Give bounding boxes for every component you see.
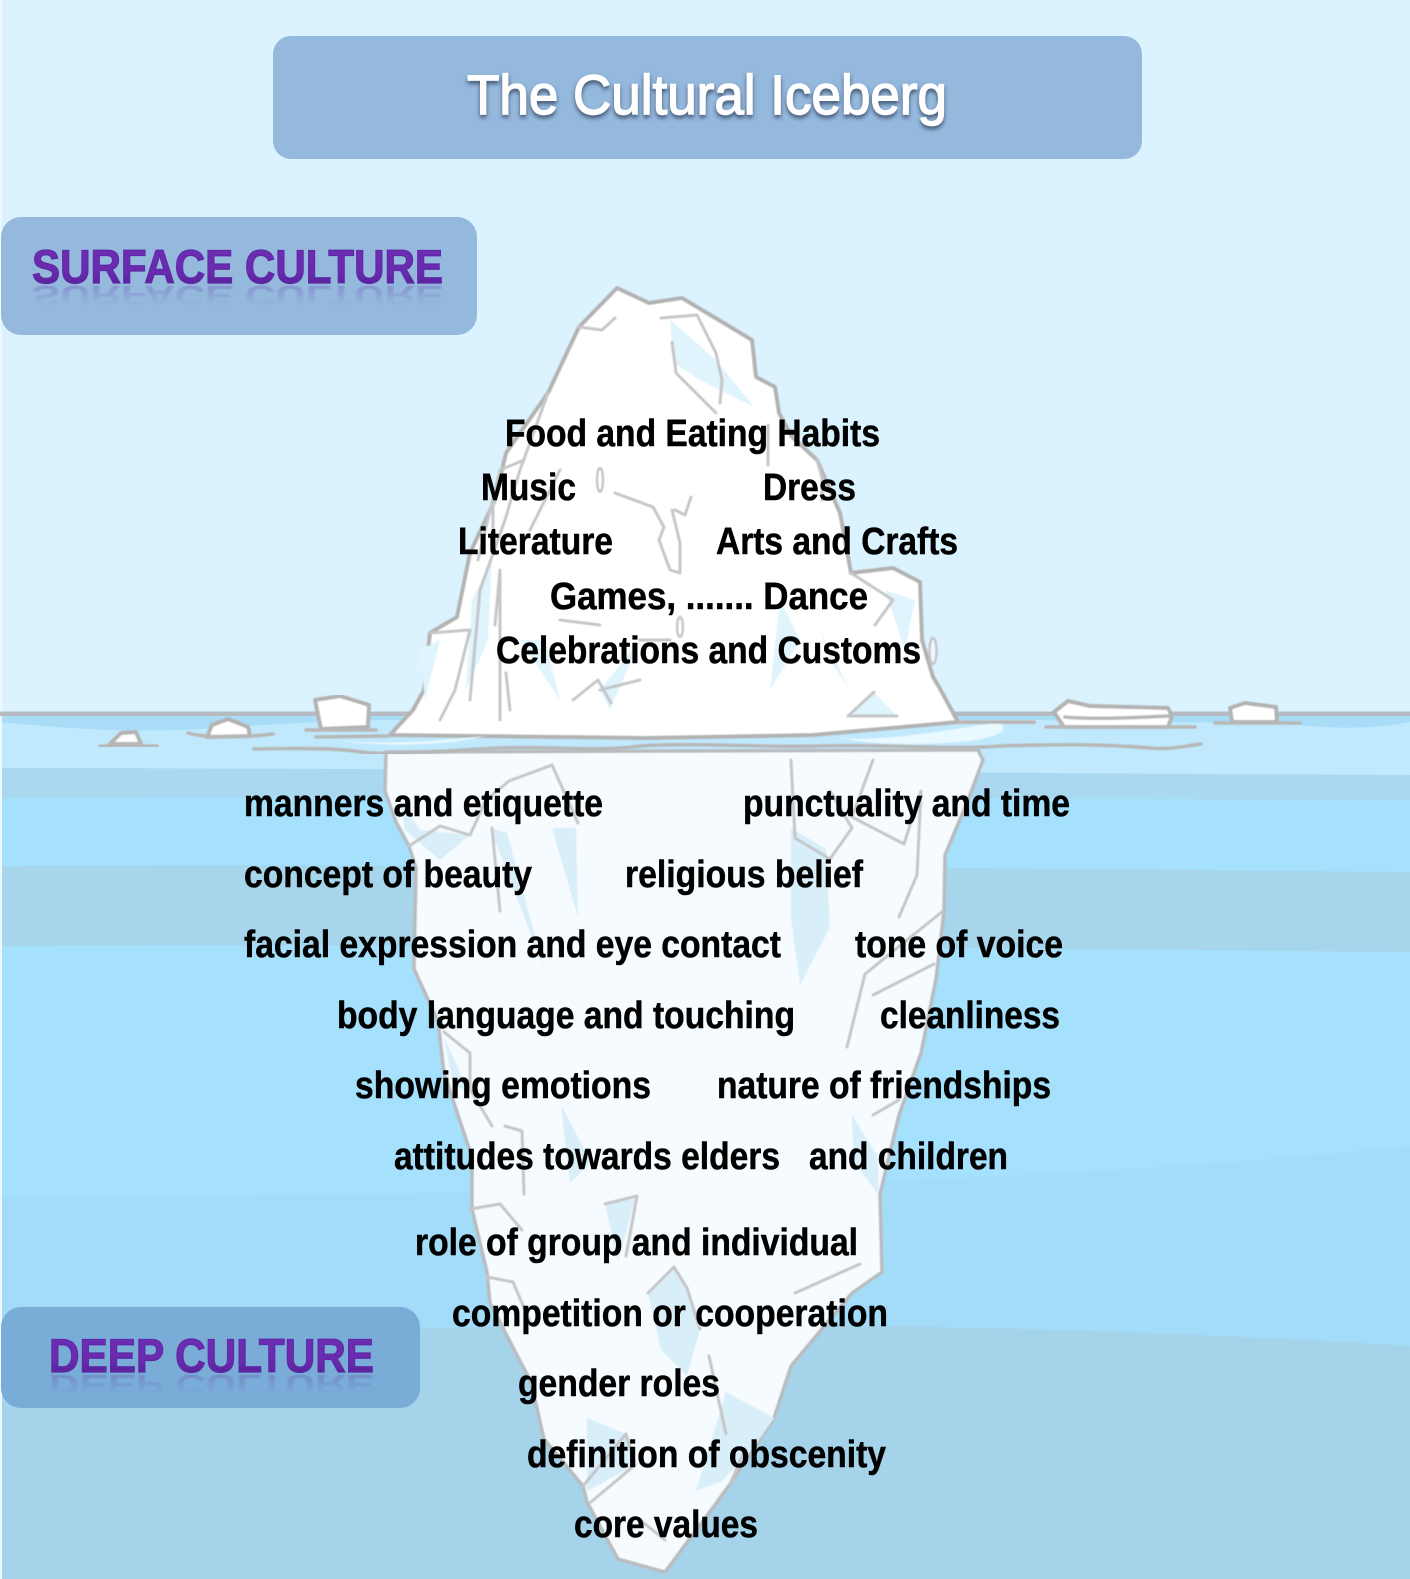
- text block: surface culture items: Music: [481, 467, 576, 509]
- iceberg: above water part: [390, 288, 958, 738]
- title text: The Cultural Iceberg: [467, 63, 947, 126]
- horizon line: [0, 712, 1410, 716]
- text block: surface culture items: [458, 413, 958, 672]
- text block: deep culture items, upper: cleanliness: [880, 995, 1060, 1037]
- text block: deep culture items, lower: core values: [574, 1504, 758, 1546]
- text block: surface culture items: Arts and Crafts: [716, 521, 958, 563]
- fragment 1: [110, 732, 141, 744]
- fragment 2: [207, 719, 250, 737]
- text block: deep culture items, upper: and children: [809, 1136, 1008, 1178]
- text block: deep culture items, upper: [244, 783, 1070, 1178]
- title banner: [273, 36, 1142, 159]
- text block: deep culture items, upper: facial expression and eye contact: [244, 924, 781, 966]
- fragment 4: [1054, 701, 1172, 727]
- panel: surface culture label: [1, 217, 477, 335]
- text block: deep culture items, lower: role of group and individual: [415, 1222, 858, 1264]
- text block: surface culture items: Dress: [763, 467, 856, 509]
- background: sky: [0, 0, 1410, 716]
- deep culture reflection: DEEP CULTURE: [49, 1368, 374, 1400]
- text block: deep culture items, lower: competition or cooperation: [452, 1293, 888, 1335]
- surface culture reflection: SURFACE CULTURE: [32, 279, 443, 311]
- text block: deep culture items, upper: nature of friendships: [717, 1065, 1051, 1107]
- surface culture text: SURFACE CULTURE: [32, 240, 443, 293]
- text block: surface culture items: Celebrations and Customs: [496, 630, 921, 672]
- iceberg: underwater part: [385, 750, 983, 1572]
- text block: surface culture items: Food and Eating Habits: [505, 413, 880, 455]
- text block: deep culture items, upper: tone of voice: [855, 924, 1063, 966]
- panel: deep culture label: [1, 1307, 420, 1408]
- deep culture text: DEEP CULTURE: [49, 1329, 374, 1382]
- waterline strokes: [100, 716, 1300, 746]
- text block: deep culture items, upper: punctuality and time: [743, 783, 1070, 825]
- text block: surface culture items: Literature: [458, 521, 613, 563]
- text block: deep culture items, upper: concept of beauty: [244, 854, 532, 896]
- text block: surface culture items: Games, ....... Dance: [550, 576, 868, 618]
- waterline and foam: [254, 722, 1201, 753]
- text block: deep culture items, lower: [415, 1222, 888, 1546]
- text block: deep culture items, lower: gender roles: [518, 1363, 720, 1405]
- fragment 3: [315, 696, 369, 729]
- text block: deep culture items, lower: definition of obscenity: [527, 1434, 886, 1476]
- text block: deep culture items, upper: body language and touching: [337, 995, 795, 1037]
- text block: deep culture items, upper: religious belief: [625, 854, 863, 896]
- text block: deep culture items, upper: attitudes towards elders: [394, 1136, 780, 1178]
- text block: deep culture items, upper: manners and etiquette: [244, 783, 603, 825]
- text block: deep culture items, upper: showing emotions: [355, 1065, 651, 1107]
- fragment 5: [1230, 703, 1277, 722]
- ice fragments: [100, 696, 1300, 746]
